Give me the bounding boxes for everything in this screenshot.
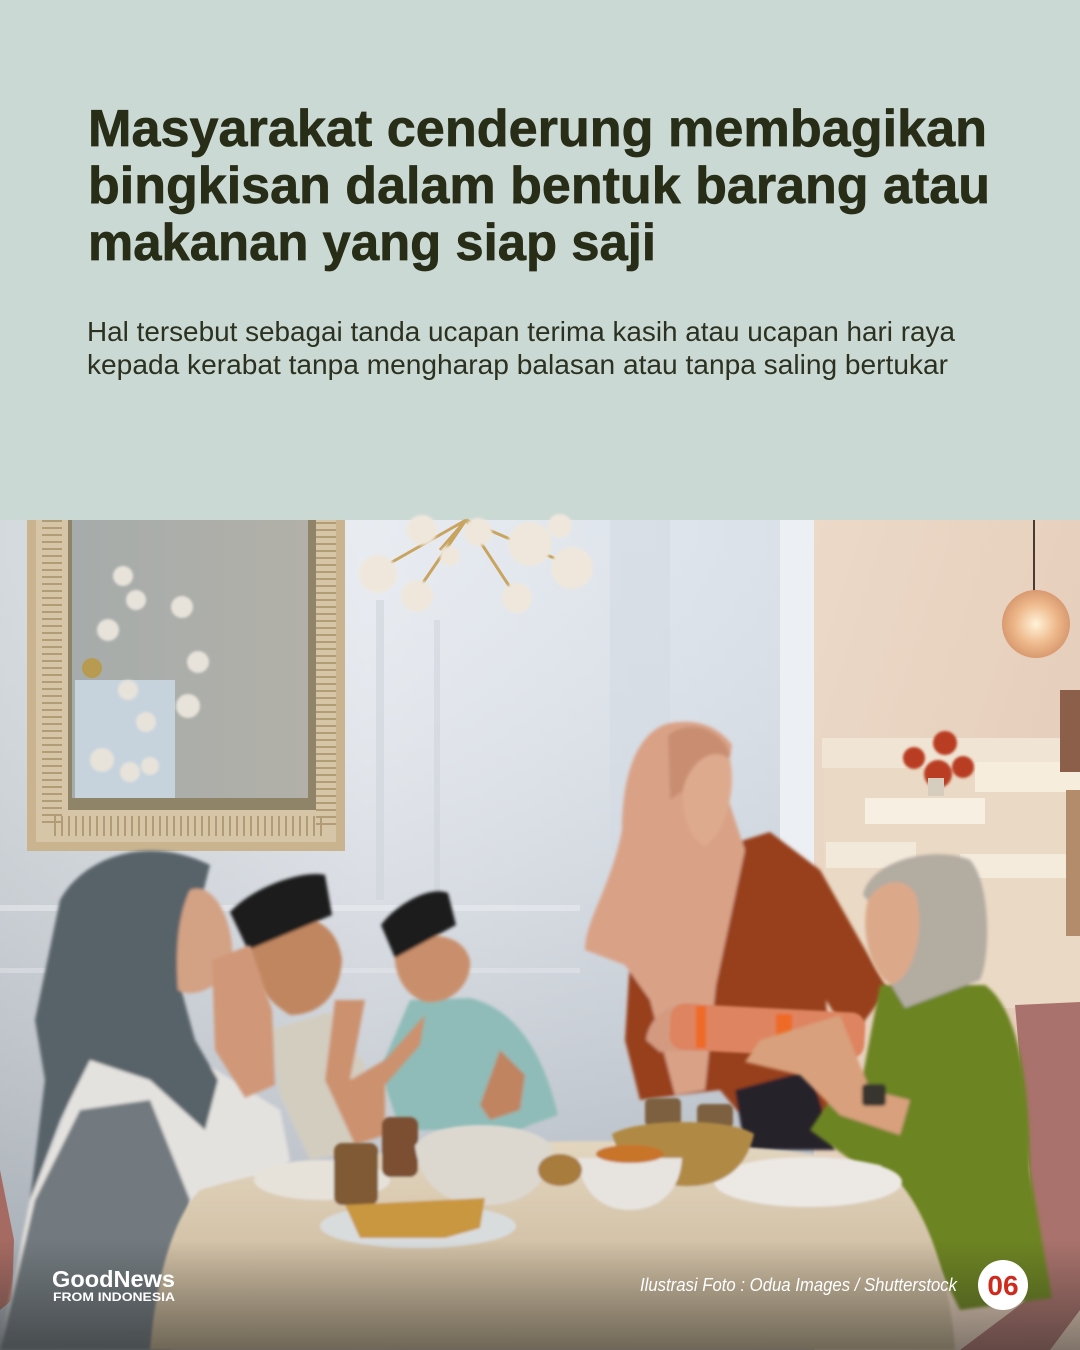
logo: GoodNews from Indonesia: FROM INDONESIA bbox=[53, 1290, 175, 1304]
man laughing with printed shirt bbox=[230, 874, 425, 1160]
gift bbox=[669, 1003, 866, 1059]
mirror bbox=[27, 520, 345, 851]
room walls bbox=[0, 520, 1080, 1350]
photo: family sharing a gift at the dining table bbox=[0, 514, 1080, 1350]
page number badge bbox=[978, 1260, 1028, 1310]
woman standing in orange hijab bbox=[585, 722, 888, 1150]
background panel bbox=[0, 0, 1080, 520]
table with food bbox=[150, 1098, 955, 1350]
subtitle bbox=[87, 316, 955, 380]
subtitle: Hal tersebut sebagai tanda ucapan terima kasih atau ucapan hari raya bbox=[87, 316, 955, 347]
man seated in teal shirt bbox=[380, 891, 558, 1130]
title: bingkisan dalam bentuk barang atau bbox=[88, 157, 990, 215]
chair bbox=[960, 1002, 1080, 1350]
title: makanan yang siap saji bbox=[88, 214, 656, 272]
logo: GoodNews from Indonesia: GoodNews bbox=[52, 1266, 175, 1292]
subtitle: kepada kerabat tanpa mengharap balasan atau tanpa saling bertukar bbox=[87, 349, 948, 380]
pendant lamp bbox=[1002, 520, 1070, 658]
photo credit: Ilustrasi Foto : Odua Images / Shutterstock bbox=[640, 1275, 958, 1295]
woman in grey hijab bbox=[0, 851, 290, 1350]
shelves and flowers bbox=[822, 690, 1080, 1008]
bottom shade bbox=[0, 1240, 1080, 1350]
woman seated in green blouse bbox=[745, 854, 1052, 1310]
title bbox=[88, 100, 990, 272]
title: Masyarakat cenderung membagikan bbox=[88, 100, 987, 158]
page number badge: 06 bbox=[987, 1270, 1019, 1301]
chandelier bbox=[359, 514, 593, 613]
logo: GoodNews from Indonesia bbox=[52, 1266, 175, 1304]
